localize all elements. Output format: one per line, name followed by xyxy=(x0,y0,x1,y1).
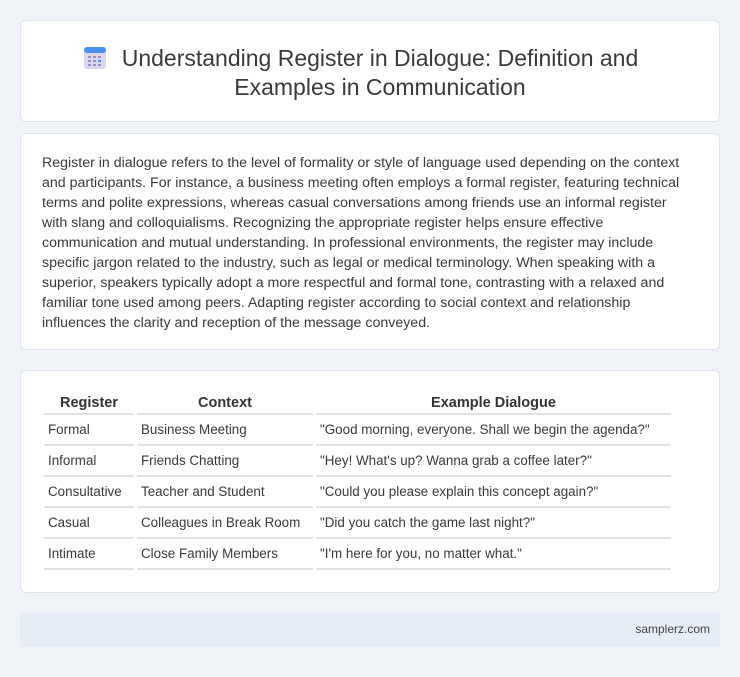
panel: table: Colleagues in Break Room xyxy=(141,515,300,530)
text block: definition: influences the clarity and reception of the message conveyed. xyxy=(42,315,430,331)
title: Understanding Register in Dialogue: Definition and Examples in Communication xyxy=(122,45,638,100)
panel: table: Example Dialogue xyxy=(431,395,556,411)
panel: table xyxy=(20,370,720,593)
header card xyxy=(20,20,720,122)
panel: table: "Good morning, everyone. Shall we begin the agenda?" xyxy=(320,422,650,437)
panel: table: Register xyxy=(60,395,118,411)
panel: table: Business Meeting xyxy=(141,422,247,437)
text block: definition: and participants. For instance, a business meeting often employs a formal register, featuring technical xyxy=(42,175,679,191)
text block: definition: with slang and colloquialisms. Recognizing the appropriate register helps ensure effective xyxy=(42,215,603,231)
panel: table: Consultative xyxy=(48,484,122,499)
panel: table: "I'm here for you, no matter what." xyxy=(320,546,522,561)
text block: definition: communication and mutual understanding. In professional environments, the register may include xyxy=(42,235,653,251)
panel: table: "Could you please explain this concept again?" xyxy=(320,484,598,499)
panel: table: Close Family Members xyxy=(141,546,278,561)
footer xyxy=(20,613,720,647)
footer: samplerz.com xyxy=(635,622,710,636)
text block: definition: specific jargon related to the industry, such as legal or medical terminology. When speaking with a xyxy=(42,255,655,271)
text block: definition: Register in dialogue refers to the level of formality or style of language used depending on the context xyxy=(42,155,679,171)
panel: table: "Hey! What's up? Wanna grab a coffee later?" xyxy=(320,453,592,468)
panel: table: Casual xyxy=(48,515,90,530)
panel: table: Friends Chatting xyxy=(141,453,239,468)
text block: definition: superior, speakers typically adopt a more respectful and formal tone, contrasting with a relaxed and xyxy=(42,275,664,291)
text block: definition xyxy=(20,133,720,350)
text block: definition: familiar tone used among peers. Adapting register according to social context and relationship xyxy=(42,295,630,311)
panel: table: Informal xyxy=(48,453,96,468)
panel: table: Teacher and Student xyxy=(141,484,265,499)
text block: definition: terms and polite expressions, whereas casual conversations among friends use an informal register xyxy=(42,195,667,211)
panel: table: "Did you catch the game last night?" xyxy=(320,515,535,530)
panel: table: Formal xyxy=(48,422,90,437)
panel: table: Intimate xyxy=(48,546,96,561)
icon: calendar xyxy=(84,47,106,69)
panel: table: Context xyxy=(198,395,252,411)
